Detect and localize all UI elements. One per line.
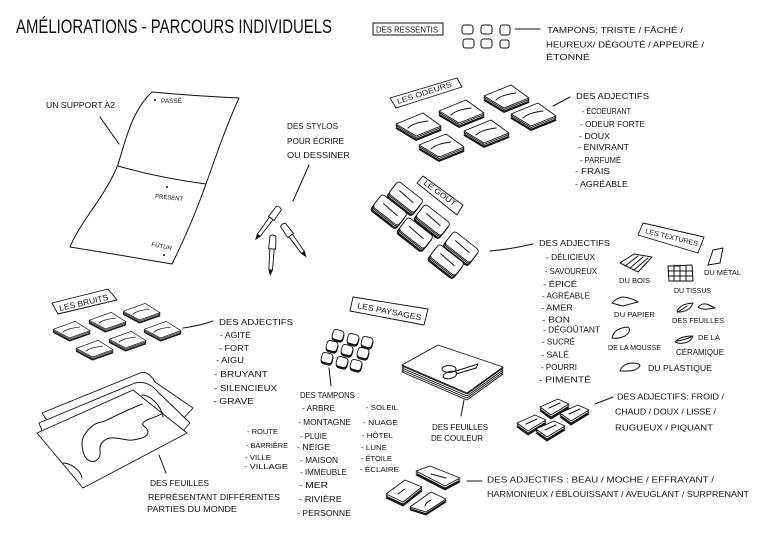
panel: stylos [253, 121, 350, 275]
adjective text: textures [615, 392, 725, 432]
label box: ressentis: DES RESSENTIS [376, 26, 438, 34]
texture: mousse: DE LA MOUSSE [608, 343, 661, 352]
adjective list: goût: - PIMENTÉ [539, 376, 591, 384]
adjective list: goût: - DÉLICIEUX [546, 253, 596, 262]
list: tampons column 3: - VILLAGE [244, 462, 288, 471]
marker: futur: FUTUR [151, 242, 173, 252]
adjective list: goût: - BON [542, 316, 570, 324]
list: tampons column 2: - SOLEIL [366, 403, 398, 412]
texture: métal: DU MÉTAL [704, 268, 741, 277]
label: colour sheets: DE COULEUR [431, 433, 483, 443]
adjective list: goût: - AGRÉABLE [542, 292, 590, 300]
texture: bois: DU BOIS [619, 276, 650, 285]
label: stylos: OU DESSINER [287, 150, 350, 160]
label box: les textures [638, 223, 704, 253]
panel: les textures [517, 223, 741, 441]
arrow: odeurs [553, 97, 570, 106]
fold line [118, 166, 206, 184]
stamps: ressentis [462, 25, 510, 48]
label: un support A2: UN SUPPORT A2 [46, 100, 115, 110]
list: tampons column 3: - ROUTE [247, 427, 278, 436]
label: feuilles monde: REPRÉSENTANT DIFFÉRENTES [148, 492, 280, 502]
marker: présent [155, 186, 184, 203]
icon: pen 3 [280, 222, 309, 259]
label box: les odeurs: LES ODEURS [396, 80, 453, 106]
adjective list: odeurs: - AGRÉABLE [575, 180, 628, 189]
texture: feuilles: DES FEUILLES [672, 318, 724, 325]
marker: futur [151, 242, 173, 256]
list: tampons column 2: - ÉTOILE [361, 454, 392, 463]
adjective list: odeurs: - ENIVRANT [578, 143, 629, 152]
texture: céramique [675, 333, 724, 357]
label box: les bruits: LES BRUITS [58, 293, 109, 313]
panel: les bruits [52, 289, 293, 406]
label box: le goût [417, 176, 463, 215]
list: tampons column 3: - BARRIÈRE [246, 441, 288, 450]
adjective list: bruits [213, 317, 293, 406]
texture: feuilles [672, 303, 724, 325]
map sheet: middle [39, 382, 190, 436]
panel: le goût [370, 176, 610, 384]
arrow: feuilles monde [159, 455, 166, 473]
label box: les paysages: LES PAYSAGES [357, 301, 422, 322]
texture: tissu [668, 265, 711, 295]
list: tampons column 1: - MONTAGNE [298, 418, 351, 427]
arrow: stylos [293, 165, 309, 201]
text: tampons: ÉTONNÉ [546, 52, 590, 62]
texture: tissu: DU TISSUS [674, 286, 711, 295]
adjective list: odeurs: - ÉCOEURANT [582, 107, 631, 116]
list: tampons column 1: - NEIGE [297, 443, 330, 452]
label: feuilles monde [147, 478, 280, 514]
card stacks: odeurs [396, 85, 556, 162]
adjective text: textures: RUGUEUX / PIQUANT [615, 422, 713, 432]
arrow: tampons [515, 28, 540, 30]
arrow: colour sheets [461, 400, 464, 416]
label: stylos: DES STYLOS [287, 121, 338, 131]
list: tampons column 1: - MAISON [300, 456, 338, 465]
arrow: tampons paysages [329, 368, 331, 386]
adjective list: bruits: - AGITÉ [220, 331, 251, 340]
adjective list: goût: - SUCRÉ [542, 338, 575, 346]
stamps: paysages [320, 329, 374, 373]
panel: les odeurs [390, 78, 649, 189]
list: tampons column 1: - PERSONNE [297, 509, 351, 518]
icon: scissors [442, 364, 478, 380]
text: tampons [546, 25, 705, 62]
list: tampons column 1: - MER [299, 481, 328, 490]
adjective list: bruits: - FORT [219, 344, 249, 353]
label box: les bruits [52, 289, 117, 314]
label: feuilles monde: DES FEUILLES [150, 478, 209, 488]
texture: céramique: DE LA [698, 333, 720, 342]
adjective list: goût: - ÉPICÉ [543, 280, 577, 289]
adjective text: paysages: HARMONIEUX / ÉBLOUISSANT / AVEUGLANT / SURPRENANT [487, 489, 749, 499]
list: tampons column 1 [297, 391, 359, 518]
card stacks: textures [517, 399, 589, 441]
adjective list: goût: - POURRI [541, 363, 577, 372]
map sheet: back [42, 372, 193, 425]
adjective list: odeurs: DES ADJECTIFS [576, 91, 649, 101]
texture: céramique: CÉRAMIQUE [676, 348, 724, 357]
arrow: paysages adjectifs [467, 480, 482, 482]
adjective list: goût: - SAVOUREUX [545, 267, 598, 276]
list: tampons column 2 [360, 403, 399, 474]
list: tampons column 2: - ÉCLAIRE [360, 465, 399, 474]
list: tampons column 1: - IMMEUBLE [300, 468, 347, 477]
list: tampons column 2: - NUAGE [363, 418, 398, 427]
icon: pen 1 [253, 205, 282, 241]
marker: passé: PASSÉ [161, 98, 182, 105]
list: tampons column 1: - ARBRE [302, 404, 335, 413]
label: colour sheets [431, 422, 488, 443]
adjective list: goût: DES ADJECTIFS [539, 238, 610, 248]
texture: papier: DU PAPIER [614, 312, 655, 319]
map sheet: front with contours [37, 390, 187, 488]
adjective list: goût [539, 238, 610, 384]
marker: passé [154, 98, 182, 105]
adjective list: goût: - AMER [541, 304, 573, 312]
adjective list: odeurs [575, 91, 649, 189]
panel: A2 support [46, 92, 239, 264]
texture: plastique: DU PLASTIQUE [648, 364, 712, 373]
label: stylos: POUR ÉCRIRE [287, 136, 344, 146]
text: tampons: TAMPONS: TRISTE / FÂCHÉ / [547, 25, 684, 35]
adjective list: bruits: - GRAVE [213, 397, 254, 406]
icon: pen 2 [267, 235, 277, 275]
adjective text: textures: CHAUD / DOUX / LISSE / [615, 406, 717, 416]
adjective list: bruits: - AIGU [216, 356, 244, 365]
text: tampons: HEUREUX/ DÉGOUTÉ / APPEURÉ / [546, 40, 705, 50]
list: tampons column 2: - HÔTEL [362, 431, 393, 440]
texture: mousse [608, 327, 661, 352]
panel: les paysages [244, 297, 749, 518]
texture: métal [704, 248, 741, 277]
arrow: bruits [183, 321, 213, 328]
card stacks: goût [370, 181, 480, 280]
list: tampons column 1: DES TAMPONS : [300, 391, 359, 400]
arrow: support [100, 117, 119, 144]
card stacks: bruits [53, 303, 181, 360]
adjective list: bruits: - BRUYANT [214, 370, 268, 379]
label box: les paysages [350, 297, 428, 325]
list: tampons column 2: - LUNE [361, 443, 387, 452]
list: tampons column 3 [244, 427, 288, 471]
label: feuilles monde: PARTIES DU MONDE [147, 504, 237, 514]
label: stylos [287, 121, 350, 160]
card stacks: paysages adjectifs [386, 466, 460, 515]
adjective list: odeurs: - FRAIS [575, 167, 610, 176]
list: tampons column 1: - PLUIE [300, 432, 327, 441]
list: tampons column 1: - RIVIÈRE [299, 495, 342, 504]
adjective list: goût: - SALÉ [541, 350, 569, 360]
arrow: goût [490, 244, 533, 251]
adjective text: paysages [487, 474, 749, 499]
list: tampons column 3: - VILLE [245, 453, 271, 462]
adjective list: odeurs: - ODEUR FORTE [580, 120, 645, 129]
adjective list: bruits: - SILENCIEUX [214, 384, 278, 393]
adjective list: goût: - DÉGOÛTANT [543, 326, 600, 334]
label box: les textures: LES TEXTURES [645, 228, 699, 248]
label box: les odeurs [390, 78, 462, 108]
texture: plastique [620, 363, 712, 373]
panel: ressentis [373, 23, 705, 62]
label: colour sheets: DES FEUILLES [432, 422, 488, 432]
adjective list: odeurs: - DOUX [579, 132, 611, 141]
texture: papier [612, 297, 655, 319]
adjective list: bruits: DES ADJECTIFS [219, 317, 293, 327]
panel: feuilles monde [37, 372, 280, 514]
texture: bois [619, 254, 652, 285]
title: AMÉLIORATIONS - PARCOURS INDIVIDUELS [16, 17, 332, 38]
adjective text: paysages: DES ADJECTIFS : BEAU / MOCHE / EFFRAYANT / [487, 474, 715, 484]
label box: ressentis [373, 23, 443, 35]
adjective list: odeurs: - PARFUMÉ [580, 156, 621, 165]
A2 sheet [70, 92, 239, 264]
label box: le goût: LE GOÛT [422, 178, 458, 208]
marker: présent: PRÉSENT [155, 193, 184, 203]
arrow: textures [595, 397, 613, 404]
adjective text: textures: DES ADJECTIFS: FROID / [617, 392, 725, 402]
colour sheets [402, 345, 503, 400]
